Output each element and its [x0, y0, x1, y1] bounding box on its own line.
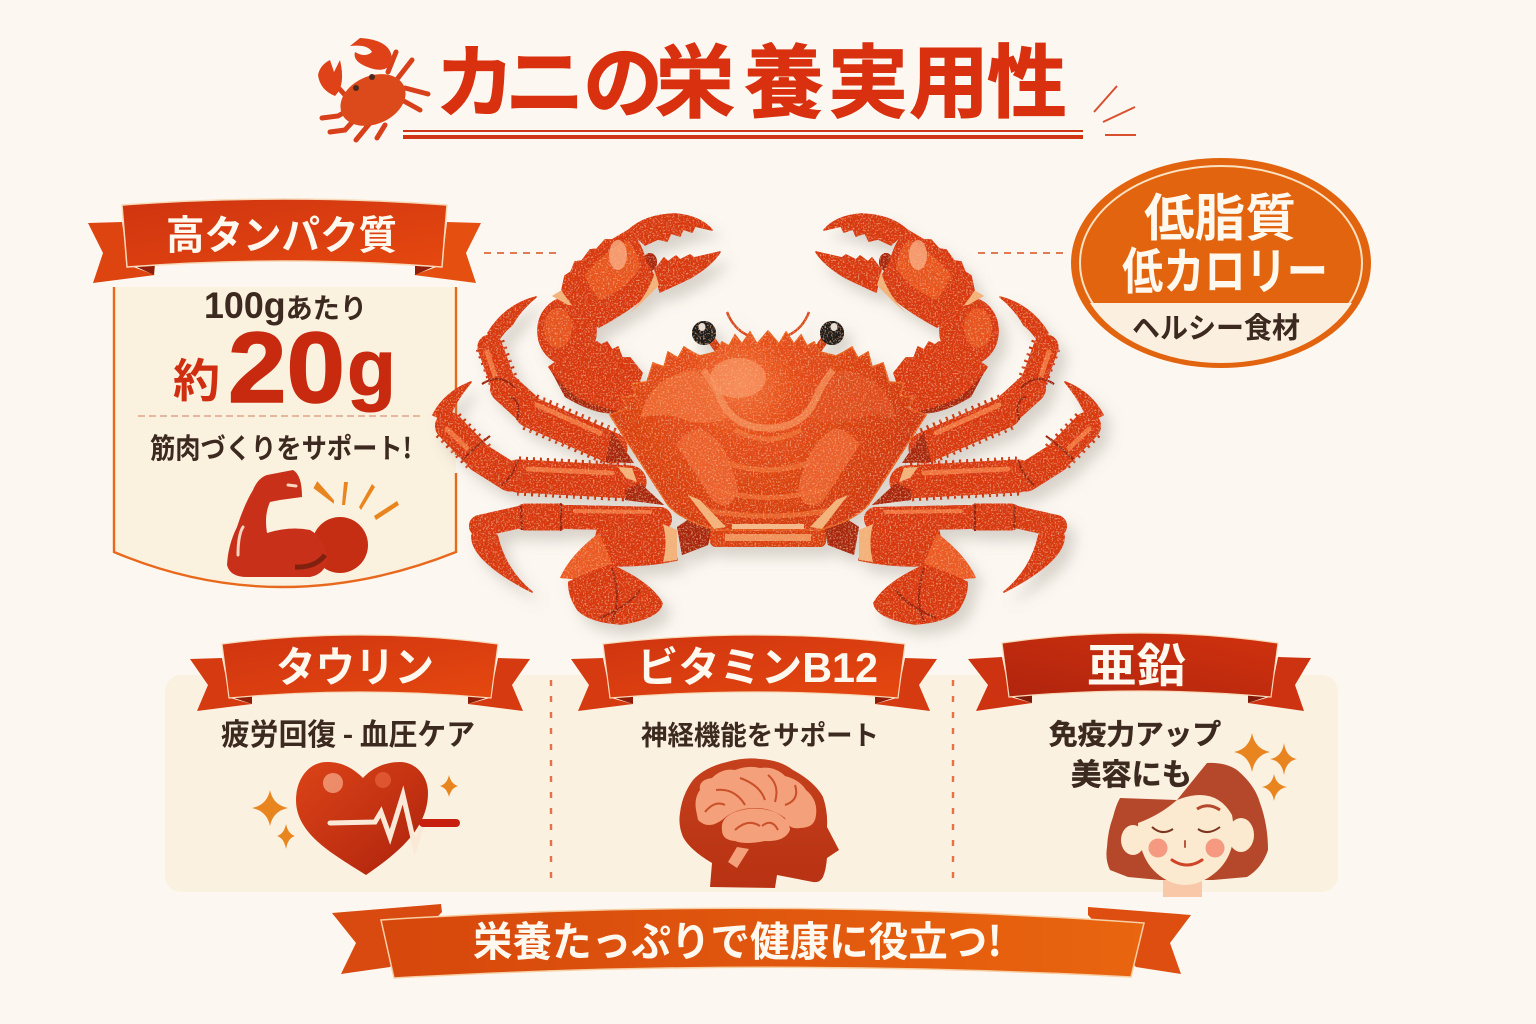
- badge: low fat low calorie: 低カロリー: [1122, 232, 1328, 304]
- icon: head with brain: [679, 758, 839, 888]
- icon: heart with pulse: [296, 762, 456, 875]
- column: taurine: [190, 634, 530, 875]
- connector: protein to crab: [484, 252, 556, 254]
- ribbon: zinc: 亜鉛: [1087, 630, 1186, 696]
- muscle caption: 筋肉づくりをサポート!: [150, 427, 412, 467]
- title crab icon: [318, 38, 428, 140]
- icon: smiling face: [1106, 763, 1268, 897]
- badge: low fat low calorie: ヘルシー食材: [1132, 305, 1300, 347]
- connector: crab to low-fat badge: [978, 252, 1066, 254]
- ribbon: vitamin B12: ビタミンB12: [637, 644, 878, 691]
- title: カニの栄養実用性: [435, 19, 1067, 135]
- zinc caption: 免疫力アップ: [1049, 713, 1221, 753]
- panel body: [114, 287, 456, 586]
- ribbon: vitamin B12: [571, 635, 937, 711]
- column: vitamin B12: [571, 635, 937, 888]
- panel divider: [138, 415, 422, 417]
- amount value: g: [347, 323, 396, 412]
- amount label: 100gあたり: [204, 285, 367, 326]
- badge: low fat low calorie: 低脂質: [1144, 177, 1296, 251]
- zinc caption: 美容にも: [1071, 750, 1192, 794]
- taurine caption: 疲労回復 - 血圧ケア: [221, 710, 475, 754]
- icon: sparkles right: [1234, 733, 1297, 801]
- B12 caption: 神経機能をサポート: [641, 714, 879, 753]
- amount value: 20: [228, 312, 345, 424]
- crab abdomen base: [710, 528, 826, 547]
- bottom banner: [332, 904, 1191, 978]
- amount value: [173, 312, 396, 424]
- crab carapace: [610, 331, 926, 530]
- bottom banner: 栄養たっぷりで健康に役立つ!: [473, 908, 1002, 968]
- ribbon: high protein: 高タンパク質: [166, 203, 397, 261]
- ribbon: taurine: [190, 634, 530, 711]
- title spark lines: [1094, 86, 1136, 135]
- ribbon: high protein: [88, 199, 481, 283]
- icon: flexed arm: [227, 470, 399, 577]
- ribbon: taurine: タウリン: [276, 634, 434, 695]
- icon: sparkles left: [252, 775, 458, 849]
- panel outline: [114, 287, 456, 587]
- amount value: 約: [173, 345, 220, 411]
- ribbon: zinc: [968, 630, 1311, 711]
- title underline: [403, 130, 1083, 139]
- panel: lower nutrients: [165, 675, 1338, 892]
- badge: low fat low calorie: [1071, 158, 1371, 368]
- panel: high protein: [88, 199, 481, 587]
- crab illustration: [433, 214, 1103, 624]
- column: zinc: [968, 630, 1311, 897]
- zinc caption: [1049, 713, 1221, 794]
